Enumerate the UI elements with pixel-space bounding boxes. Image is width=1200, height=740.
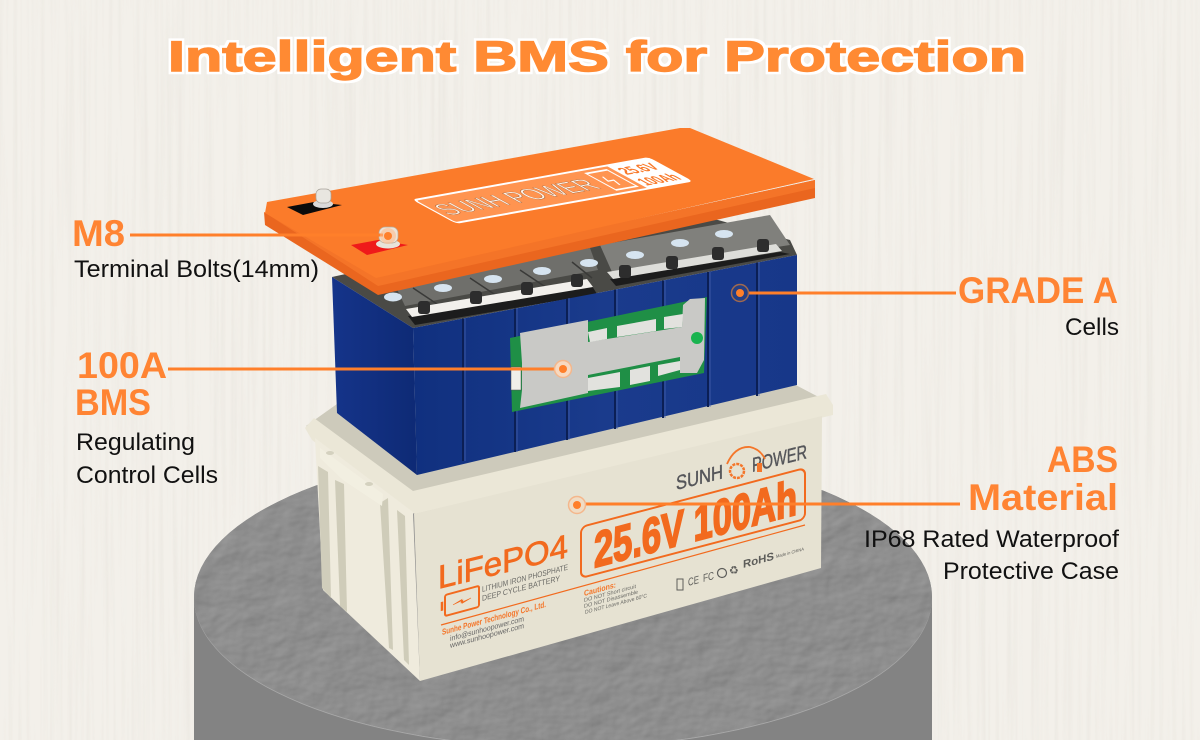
lid logo panel: SUNH POWER (427, 176, 608, 219)
lid side (264, 180, 815, 295)
case inner top ledge (306, 382, 832, 500)
heading (75, 345, 167, 423)
case left side with ribs (315, 438, 420, 681)
heading: ABS (1047, 439, 1118, 480)
cautions text: DO NOT Disassemble (584, 589, 638, 610)
callout: ABS material (568, 439, 1119, 585)
PCB contacts lower (588, 361, 680, 391)
marker dot (554, 360, 572, 378)
heading (968, 439, 1118, 518)
leader line (168, 368, 555, 370)
callout: Grade A cells (732, 270, 1119, 341)
cautions text: DO NOT Short circuit (584, 584, 636, 604)
red terminal pad (351, 240, 408, 255)
description (76, 429, 218, 489)
blue LiFePO4 cell pack (332, 215, 797, 475)
connector (511, 367, 521, 390)
divider lines on label (441, 525, 805, 625)
callout: 100A BMS (75, 345, 572, 489)
cautions text (584, 580, 647, 616)
cell pack front face (413, 255, 797, 475)
heading: Material (968, 477, 1118, 518)
company contact text: www.sunhoopower.com (449, 621, 524, 650)
certification marks (677, 546, 805, 590)
lid logo panel (414, 158, 691, 223)
certification marks: ♻ (729, 564, 739, 577)
certification marks: RoHS (743, 551, 775, 571)
brand logo on case (676, 442, 807, 495)
cautions text: DO NOT Leave Above 60°C (585, 593, 647, 616)
green sticker (691, 332, 703, 344)
description: Control Cells (76, 462, 218, 489)
battery case: cream ABS housing (305, 382, 833, 681)
positive terminal bolt (376, 227, 400, 248)
description: IP68 Rated Waterproof (864, 526, 1119, 553)
certification marks: CE (688, 574, 699, 589)
battery type text: LITHIUM IRON PHOSPHATE (482, 563, 568, 594)
brand logo on case: SUNH (676, 462, 723, 495)
heading: 100A (77, 345, 167, 386)
heading: GRADE A (958, 270, 1118, 311)
cell pack left face (332, 277, 417, 475)
silver heat-sink plate (520, 298, 705, 408)
icon: battery (442, 586, 479, 617)
front label artwork on the case (438, 442, 807, 650)
brand logo on case: POWER (752, 442, 807, 477)
cell separators (463, 263, 757, 461)
green PCB (510, 297, 707, 412)
marker dot (732, 284, 748, 302)
description: Cells (1065, 314, 1119, 341)
marker dot (380, 228, 396, 244)
certification marks: FC (703, 570, 714, 585)
case rim (305, 394, 833, 514)
marker dot (568, 496, 586, 514)
heading: BMS (75, 382, 151, 423)
leader line (130, 234, 383, 236)
negative terminal bolt (313, 189, 333, 208)
chemistry text: LiFePO4 (438, 528, 568, 597)
company contact text: Sunhe Power Technology Co., Ltd. (442, 599, 546, 637)
cell pack top with terminals (332, 215, 797, 328)
capacity box (581, 468, 805, 578)
cautions text: Cautions: (584, 580, 616, 598)
description (864, 526, 1119, 585)
description: Terminal Bolts(14mm) (74, 256, 319, 283)
grey cylindrical pedestal (194, 485, 932, 740)
heading: M8 (72, 213, 125, 254)
battery type text: DEEP CYCLE BATTERY (482, 574, 560, 603)
leader line (749, 292, 956, 294)
lid logo panel: ϟ (596, 174, 628, 189)
black terminal pad (287, 202, 342, 215)
capacity box: 25.6V 100Ah (594, 469, 797, 578)
PCB contacts upper (588, 314, 683, 342)
BMS circuit board (510, 297, 707, 412)
leader line (585, 502, 960, 506)
lid logo panel: 25.6V (613, 161, 666, 177)
title: Intelligent BMS for Protection (168, 33, 1026, 81)
description: Regulating (76, 429, 195, 456)
company contact text (442, 599, 546, 650)
case front face (414, 416, 822, 681)
company contact text: info@sunhoopower.com (450, 614, 524, 643)
certification marks: Made in CHINA (776, 546, 805, 559)
lid logo panel: 100Ah (633, 172, 687, 188)
orange lid (264, 128, 815, 295)
description: Protective Case (943, 558, 1119, 585)
lid top (265, 128, 814, 278)
callout: M8 terminal bolts (72, 213, 396, 283)
